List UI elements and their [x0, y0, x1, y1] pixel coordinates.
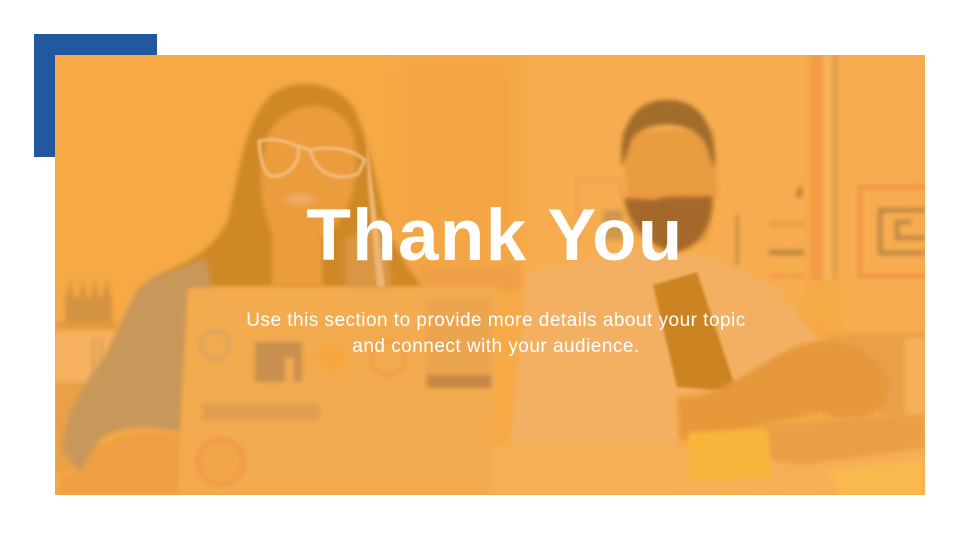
- smile: [285, 193, 315, 205]
- man: [510, 100, 890, 445]
- tablet: [763, 414, 925, 465]
- sticker: poster: [425, 298, 492, 388]
- shirt: [653, 272, 737, 392]
- beard: [624, 196, 712, 252]
- yellow note: [688, 430, 772, 480]
- poster band: [427, 375, 491, 388]
- face and neck: [261, 106, 356, 287]
- face: [622, 130, 718, 255]
- woman: [60, 84, 422, 495]
- sticker: emoji: [318, 344, 346, 372]
- laptop: [180, 288, 498, 495]
- sticker: circle: [201, 331, 229, 359]
- title: Thank You: [306, 195, 684, 276]
- sticker: ring: [371, 341, 405, 375]
- wall art and shelf: [55, 55, 930, 472]
- hair highlight: [366, 135, 385, 287]
- glasses: [259, 140, 365, 177]
- hair: [621, 100, 714, 170]
- orange background: [55, 55, 925, 495]
- sticker: text: [202, 403, 320, 421]
- sticker: f: [255, 342, 302, 382]
- yellow object: [826, 460, 925, 495]
- sticker: instagram: [198, 439, 244, 485]
- jacket: [510, 252, 820, 445]
- hair: [152, 84, 422, 287]
- blue accent square: [34, 34, 157, 157]
- room wall shading: [400, 45, 931, 335]
- table and foreground: [490, 414, 925, 495]
- subtitle text: [246, 310, 746, 356]
- table top: [490, 440, 925, 495]
- arm: [60, 432, 180, 495]
- shirt shoulder right: [345, 215, 392, 287]
- laptop lid: [180, 288, 498, 495]
- subtitle text: and connect with your audience.: [352, 336, 640, 356]
- subtitle text: Use this section to provide more details about your topic: [246, 310, 746, 331]
- hands and arm: [678, 341, 890, 440]
- shirt: [62, 258, 212, 472]
- photo panel with orange overlay: [55, 55, 925, 495]
